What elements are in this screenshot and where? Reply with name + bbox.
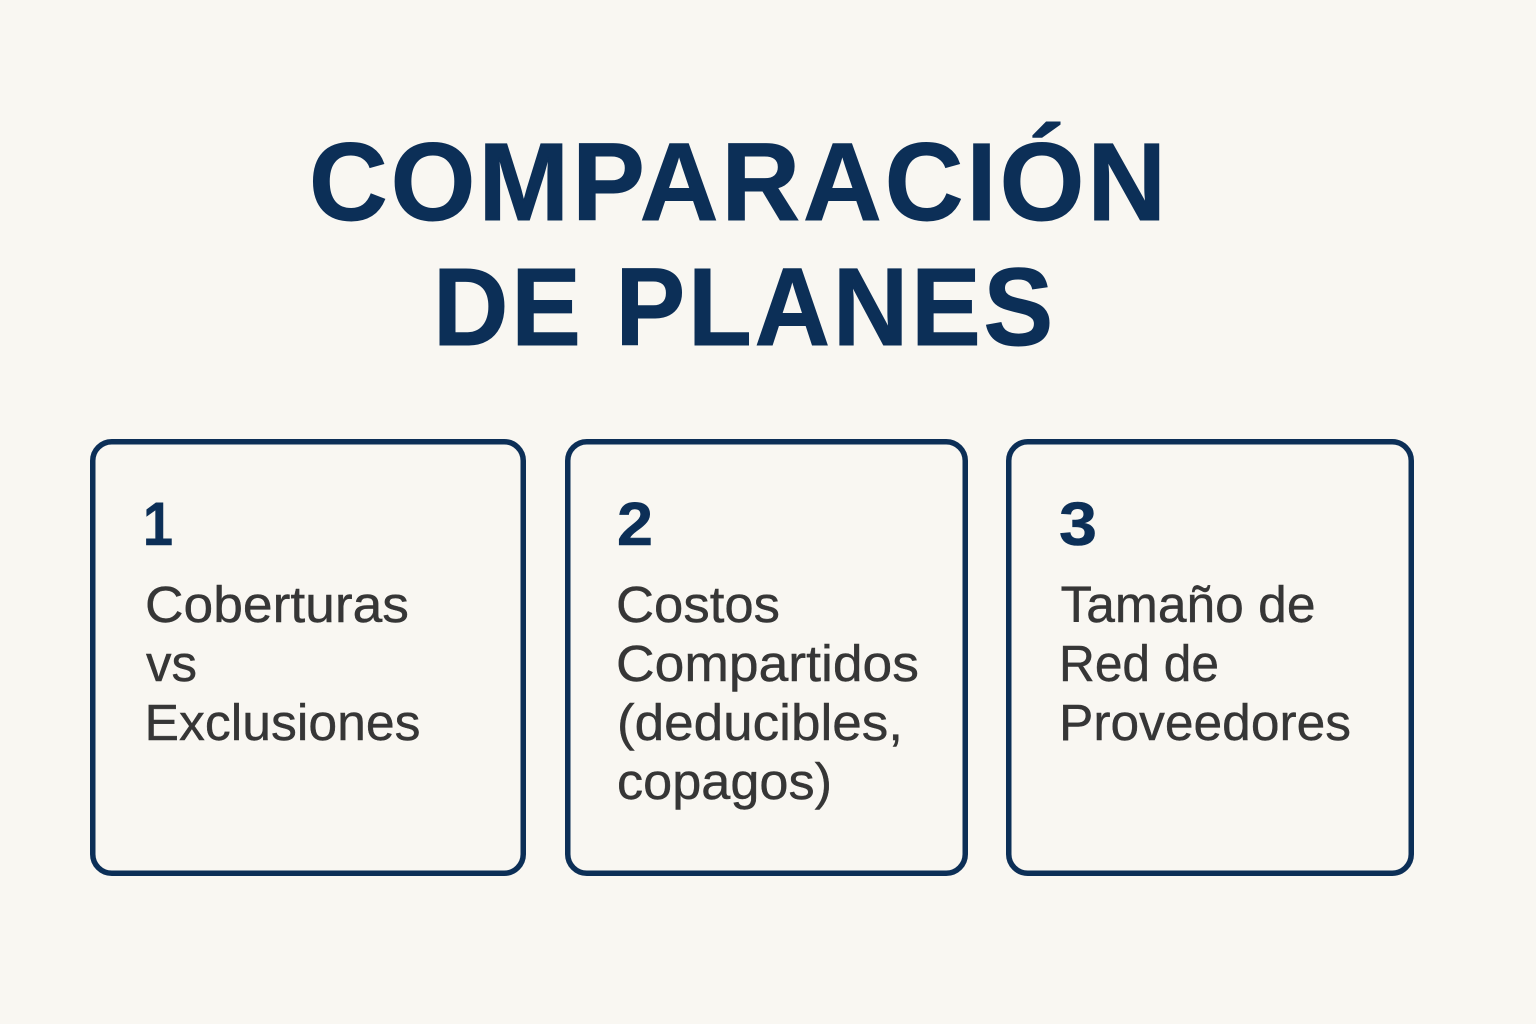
panel: card 2 bbox=[568, 442, 965, 873]
text: Tamaño de Red de Proveedores: Proveedores bbox=[1059, 694, 1351, 751]
number 3: 3 bbox=[1059, 490, 1097, 558]
title: DE PLANES bbox=[433, 246, 1056, 369]
text: Tamaño de Red de Proveedores bbox=[1059, 576, 1351, 751]
text: Coberturas vs Exclusiones: vs bbox=[146, 635, 197, 692]
text: Costos Compartidos (deducibles, copagos): (deducibles, bbox=[617, 694, 903, 751]
panel: card 1 bbox=[93, 442, 523, 873]
panel: card 3 bbox=[1009, 442, 1411, 873]
text: Costos Compartidos (deducibles, copagos): Compartidos bbox=[616, 635, 919, 692]
text: Tamaño de Red de Proveedores: Tamaño de bbox=[1060, 576, 1316, 633]
text: Costos Compartidos (deducibles, copagos) bbox=[616, 576, 919, 810]
title: COMPARACIÓN bbox=[309, 121, 1169, 244]
text: Tamaño de Red de Proveedores: Red de bbox=[1059, 635, 1219, 692]
text: Coberturas vs Exclusiones: Exclusiones bbox=[144, 694, 420, 751]
text: Costos Compartidos (deducibles, copagos): Costos bbox=[616, 576, 780, 633]
number 1: 1 bbox=[143, 490, 173, 558]
text: Coberturas vs Exclusiones bbox=[144, 576, 420, 751]
number 2: 2 bbox=[617, 490, 653, 558]
title bbox=[309, 121, 1169, 369]
text: Coberturas vs Exclusiones: Coberturas bbox=[145, 576, 409, 633]
text: Costos Compartidos (deducibles, copagos): copagos) bbox=[617, 753, 832, 810]
